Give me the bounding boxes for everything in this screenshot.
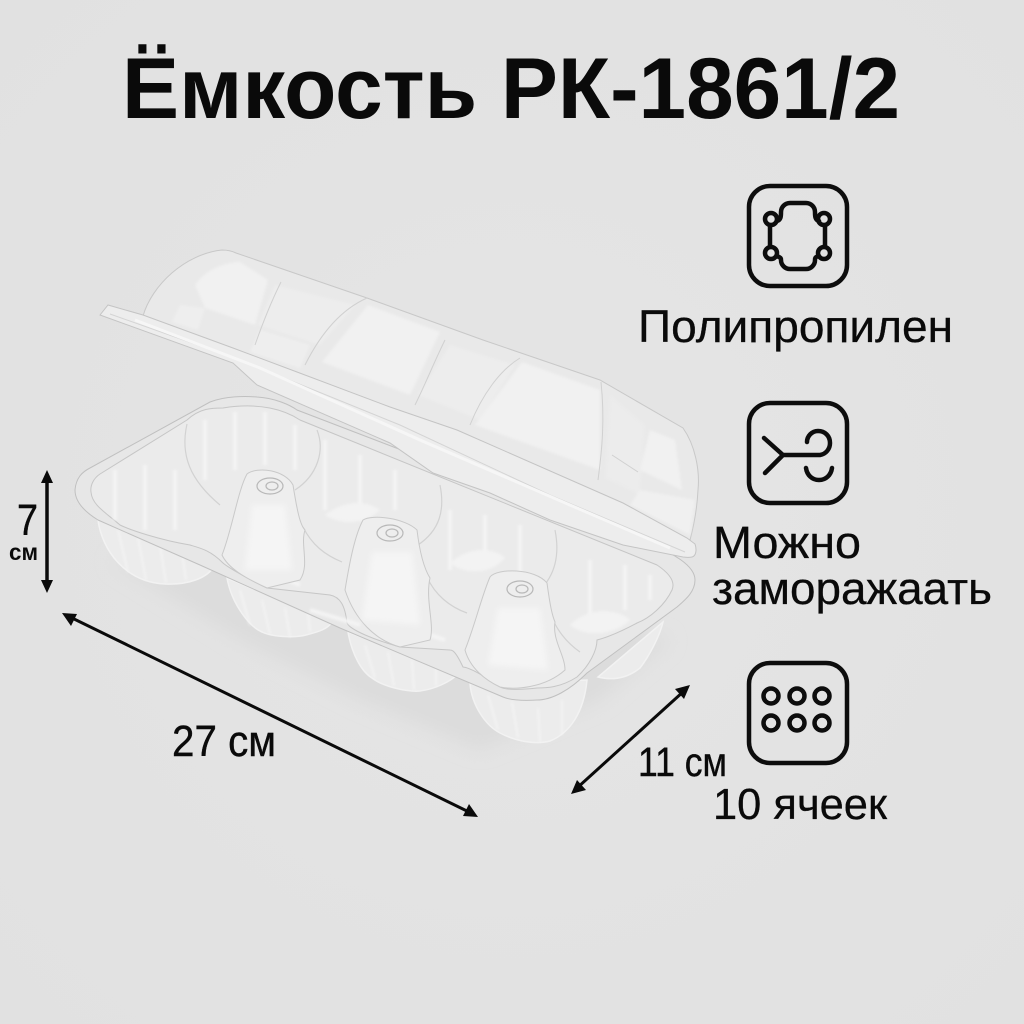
lid hinge strip [100,305,696,557]
label: 11 cm: 11 см [638,739,727,785]
arrow: length [62,613,478,817]
cup ribs [118,530,562,742]
label: 7: 7 [17,496,38,545]
label: ten cells: 10 ячеек [713,780,888,829]
well ribs [115,412,650,640]
arrow: width [571,685,690,794]
dimension: length 27 cm [62,613,478,817]
cone highlights [245,505,548,670]
tray base [75,397,695,700]
label: can be frozen: Можно [713,517,861,568]
dimension: width 11 cm [571,685,727,794]
lid dome [143,250,698,540]
icon: material polypropylene [749,186,847,286]
label: can be frozen [712,517,992,614]
label: 27 cm: 27 см [172,717,276,766]
center cones [222,470,565,688]
icon: ten cells [749,663,847,763]
dimension: height 7 cm [9,470,53,593]
lower cups under the tray [98,520,663,743]
lid facets [172,262,695,535]
cone top rings [257,478,533,597]
tray egg wells [185,424,580,652]
arrow: height [41,470,53,593]
icon: can be frozen [749,403,847,503]
label: can be frozen: заморажаать [712,563,992,614]
label: cm: см [9,539,38,565]
product photo: clear plastic egg container [75,250,698,750]
title: Ёмкость РК-1861/2 [122,41,900,137]
soft shadow under the tray [110,560,670,750]
tray highlights [325,503,630,633]
label: polypropylene: Полипропилен [638,301,953,352]
